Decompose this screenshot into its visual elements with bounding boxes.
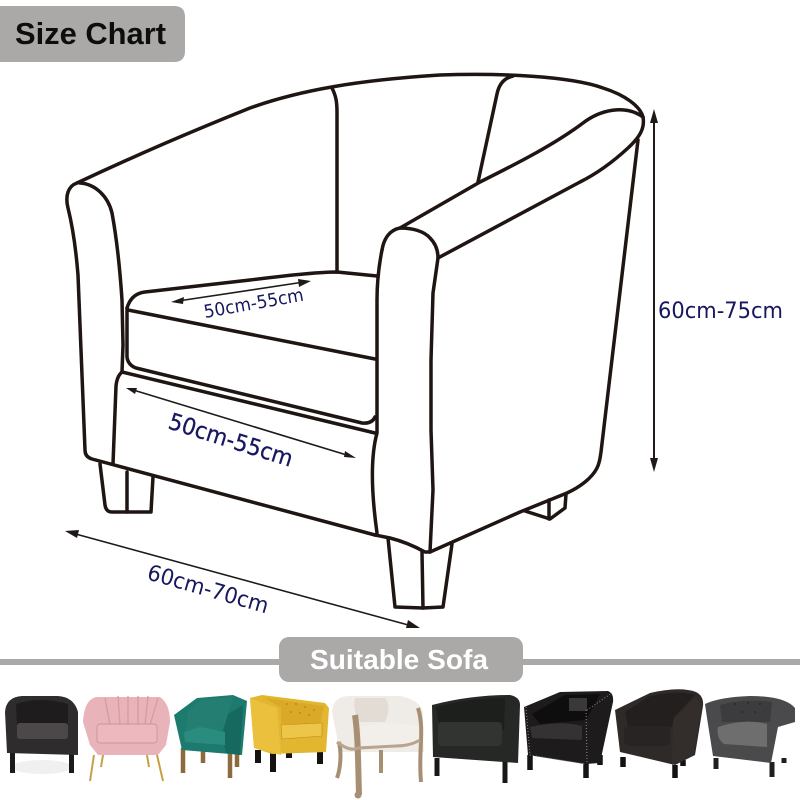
label: height 60cm-75cm: 60cm-75cm — [658, 299, 783, 324]
divider line — [0, 659, 800, 665]
heading: Suitable Sofa: Suitable Sofa — [310, 644, 488, 675]
sofa 5: cream with carved wood frame — [332, 696, 424, 798]
heading: Size Chart: Size Chart — [15, 16, 166, 51]
line drawing: tub chair — [67, 74, 643, 552]
sofa 4: mustard tufted — [250, 695, 329, 772]
heading: Size Chart — [0, 6, 185, 62]
sofa 7: black leather with studs — [524, 691, 613, 778]
heading: Suitable Sofa — [279, 637, 523, 682]
arrow: height — [650, 109, 658, 472]
label: seat depth 50cm-55cm: 50cm-55cm — [202, 285, 305, 323]
sofa 3: teal fabric — [174, 695, 247, 778]
sofa 8: dark brown leather — [615, 689, 703, 778]
arrow: overall width — [65, 530, 420, 628]
sofa 2: pink velvet — [83, 696, 170, 781]
sofa 1: black leather — [5, 696, 78, 774]
sofa 6: black tub chair — [432, 695, 520, 783]
label: overall width 60cm-70cm: 60cm-70cm — [144, 561, 271, 619]
arrow: front width — [126, 388, 356, 458]
arrow: seat depth — [171, 279, 311, 304]
chair legs — [100, 464, 566, 608]
label: front width 50cm-55cm: 50cm-55cm — [165, 409, 296, 473]
sofa 9: grey tufted — [705, 696, 795, 777]
